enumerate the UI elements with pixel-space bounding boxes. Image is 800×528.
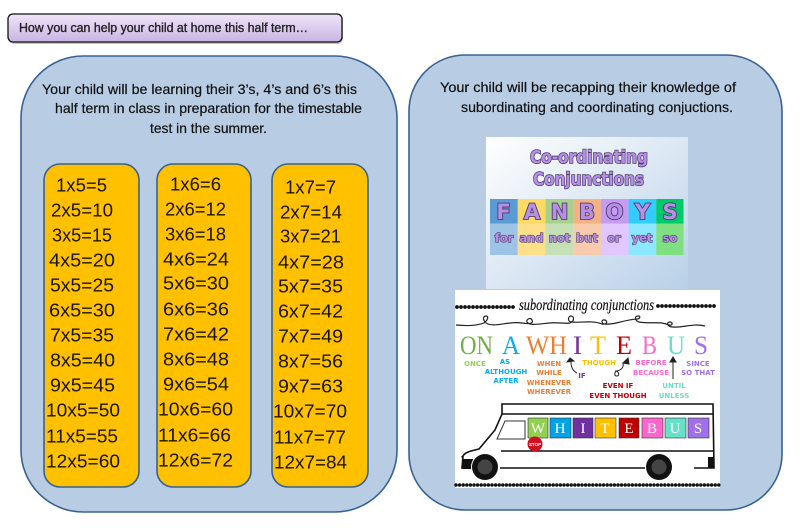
swirl divider	[456, 316, 705, 327]
school bus: H	[555, 421, 566, 437]
FANBOYS grid: but	[576, 231, 598, 245]
bus window letters	[528, 418, 709, 438]
conjunction word lists: UNTIL	[662, 382, 686, 390]
school bus: I	[580, 421, 586, 437]
conjunction word lists: THOUGH	[582, 359, 616, 367]
conjunction word lists: WHENEVER	[527, 379, 572, 387]
card: 7 times table: 2x7=14	[280, 202, 342, 222]
intro text: conjunctions: Your child will be recapping their knowledge of	[440, 79, 736, 95]
card: 5 times table: 9x5=45	[50, 376, 115, 396]
poster title: subordinating conjunctions	[519, 297, 654, 314]
FANBOYS grid: F	[496, 200, 511, 224]
card: 7 times table: 1x7=7	[285, 178, 336, 198]
WHITE BUS heading letters: S	[694, 331, 708, 360]
FANBOYS grid: A	[524, 200, 541, 224]
card: 7 times table: 6x7=42	[278, 302, 343, 322]
FANBOYS grid: yet	[632, 231, 653, 245]
card: 7 times table: 8x7=56	[278, 352, 343, 372]
card: 6 times table: 11x6=66	[158, 426, 231, 446]
school bus: S	[694, 421, 702, 437]
school bus: E	[624, 421, 634, 437]
conjunction word lists: SINCE	[686, 360, 710, 368]
card: 5 times table: 8x5=40	[50, 350, 115, 370]
conjunction word lists: UNLESS	[659, 392, 689, 400]
FANBOYS grid: for	[495, 231, 514, 245]
conjunction word lists: SO THAT	[681, 369, 715, 377]
bus bumpers	[462, 459, 473, 469]
card: 7 times table: 10x7=70	[273, 402, 347, 422]
WHITE BUS heading letters: A	[502, 331, 520, 360]
FANBOYS grid: B	[579, 200, 595, 224]
panel: times tables	[21, 56, 397, 512]
school bus: W	[531, 421, 546, 437]
FANBOYS grid: and	[519, 231, 544, 245]
card: 7 times table: 11x7=77	[274, 428, 346, 448]
WHITE BUS heading letters	[460, 331, 708, 360]
conjunction word lists: EVEN IF	[603, 382, 634, 390]
conjunction word lists	[464, 358, 715, 400]
WHITE BUS heading letters: T	[590, 331, 606, 360]
conjunction word lists: AFTER	[493, 377, 519, 385]
WHITE BUS heading letters: B	[642, 331, 657, 360]
card: 7 times table: 5x7=35	[278, 276, 343, 296]
card: 7 times table: 9x7=63	[278, 376, 343, 396]
card: 5 times table: 1x5=5	[56, 176, 107, 196]
card: 5 times table: 4x5=20	[49, 250, 115, 270]
poster title: Conjunctions	[533, 169, 644, 190]
WHITE BUS heading letters: E	[616, 331, 632, 360]
FANBOYS grid: N	[551, 200, 568, 224]
conjunction word lists: WHEN	[537, 360, 561, 368]
card: 6 times table	[157, 164, 251, 487]
WHITE BUS heading letters: U	[667, 331, 685, 360]
dotted rule right	[658, 304, 718, 308]
card: 7 times table: 7x7=49	[278, 326, 343, 346]
card: 6 times table: 4x6=24	[163, 250, 229, 270]
dotted rule left	[457, 305, 517, 309]
card: 6 times table: 2x6=12	[165, 200, 226, 220]
intro text: conjunctions: subordinating and coordinating conjuctions.	[461, 99, 733, 115]
card: 6 times table: 7x6=42	[163, 324, 229, 344]
conjunction word lists: ONCE	[464, 360, 486, 368]
FANBOYS grid: S	[662, 200, 678, 224]
intro text: times tables: Your child will be learning their 3’s, 4’s and 6’s this	[42, 81, 357, 97]
card: 5 times table: 6x5=30	[49, 300, 115, 320]
conjunction word lists: AS	[500, 358, 510, 366]
conjunction word lists: WHEREVER	[527, 388, 572, 396]
card: 5 times table: 7x5=35	[50, 326, 114, 346]
intro text: times tables: half term in class in preparation for the timestable	[55, 100, 362, 116]
card: 6 times table: 6x6=36	[163, 300, 229, 320]
conjunction word lists: EVEN THOUGH	[589, 392, 647, 400]
FANBOYS grid	[490, 199, 684, 255]
card: 7 times table: 3x7=21	[280, 226, 341, 246]
conjunction word lists: BECAUSE	[633, 369, 669, 377]
stop sign	[528, 436, 542, 452]
bus wheels	[471, 453, 673, 481]
conjunction word lists: WHILE	[536, 369, 562, 377]
card: 5 times table: 5x5=25	[50, 276, 114, 296]
dotted ground line	[456, 483, 719, 487]
card: 6 times table: 1x6=6	[170, 174, 221, 194]
intro text: conjunctions	[440, 79, 736, 115]
card: 5 times table: 10x5=50	[46, 400, 120, 420]
heading banner	[8, 14, 343, 44]
card: 6 times table: 9x6=54	[163, 374, 229, 394]
card: 6 times table: 5x6=30	[163, 274, 229, 294]
card: 5 times table: 2x5=10	[51, 200, 113, 220]
FANBOYS grid: Y	[634, 200, 651, 224]
poster title	[530, 147, 648, 190]
arrows to letters	[567, 357, 676, 379]
poster: coordinating conjunctions	[486, 137, 688, 289]
card: 5 times table: 11x5=55	[46, 426, 118, 446]
card: 7 times table: 4x7=28	[278, 252, 344, 272]
card: 7 times table	[272, 164, 368, 487]
card: 5 times table: 12x5=60	[46, 452, 120, 472]
card: 6 times table: 3x6=18	[165, 224, 226, 244]
card: 5 times table: 3x5=15	[52, 226, 112, 246]
poster title: Co-ordinating	[530, 147, 648, 168]
school bus: B	[647, 421, 657, 437]
FANBOYS grid: O	[606, 200, 623, 224]
stop sign: STOP	[529, 442, 541, 447]
card: 6 times table: 10x6=60	[158, 400, 233, 420]
conjunction word lists: BEFORE	[635, 359, 667, 367]
card: 6 times table: 12x6=72	[158, 450, 233, 470]
WHITE BUS heading letters: I	[573, 331, 582, 360]
conjunction word lists: ALTHOUGH	[485, 368, 527, 376]
school bus: U	[670, 421, 681, 437]
FANBOYS grid: not	[549, 231, 571, 245]
heading banner: How you can help your child at home this half term…	[19, 21, 308, 35]
card: 7 times table: 12x7=84	[274, 452, 347, 472]
poster: subordinating conjunctions	[455, 290, 720, 488]
school bus	[462, 404, 714, 481]
intro text: times tables	[42, 81, 362, 136]
intro text: times tables: test in the summer.	[150, 120, 267, 136]
conjunction word lists: IF	[578, 372, 586, 380]
panel: conjunctions	[409, 55, 782, 510]
WHITE BUS heading letters: WH	[526, 331, 567, 360]
bus windscreen	[497, 421, 525, 439]
card: 6 times table: 8x6=48	[163, 350, 229, 370]
school bus: T	[600, 421, 610, 437]
FANBOYS grid: or	[607, 231, 621, 245]
card: 5 times table	[44, 164, 139, 487]
FANBOYS grid: so	[663, 231, 677, 245]
WHITE BUS heading letters: ON	[460, 331, 493, 360]
